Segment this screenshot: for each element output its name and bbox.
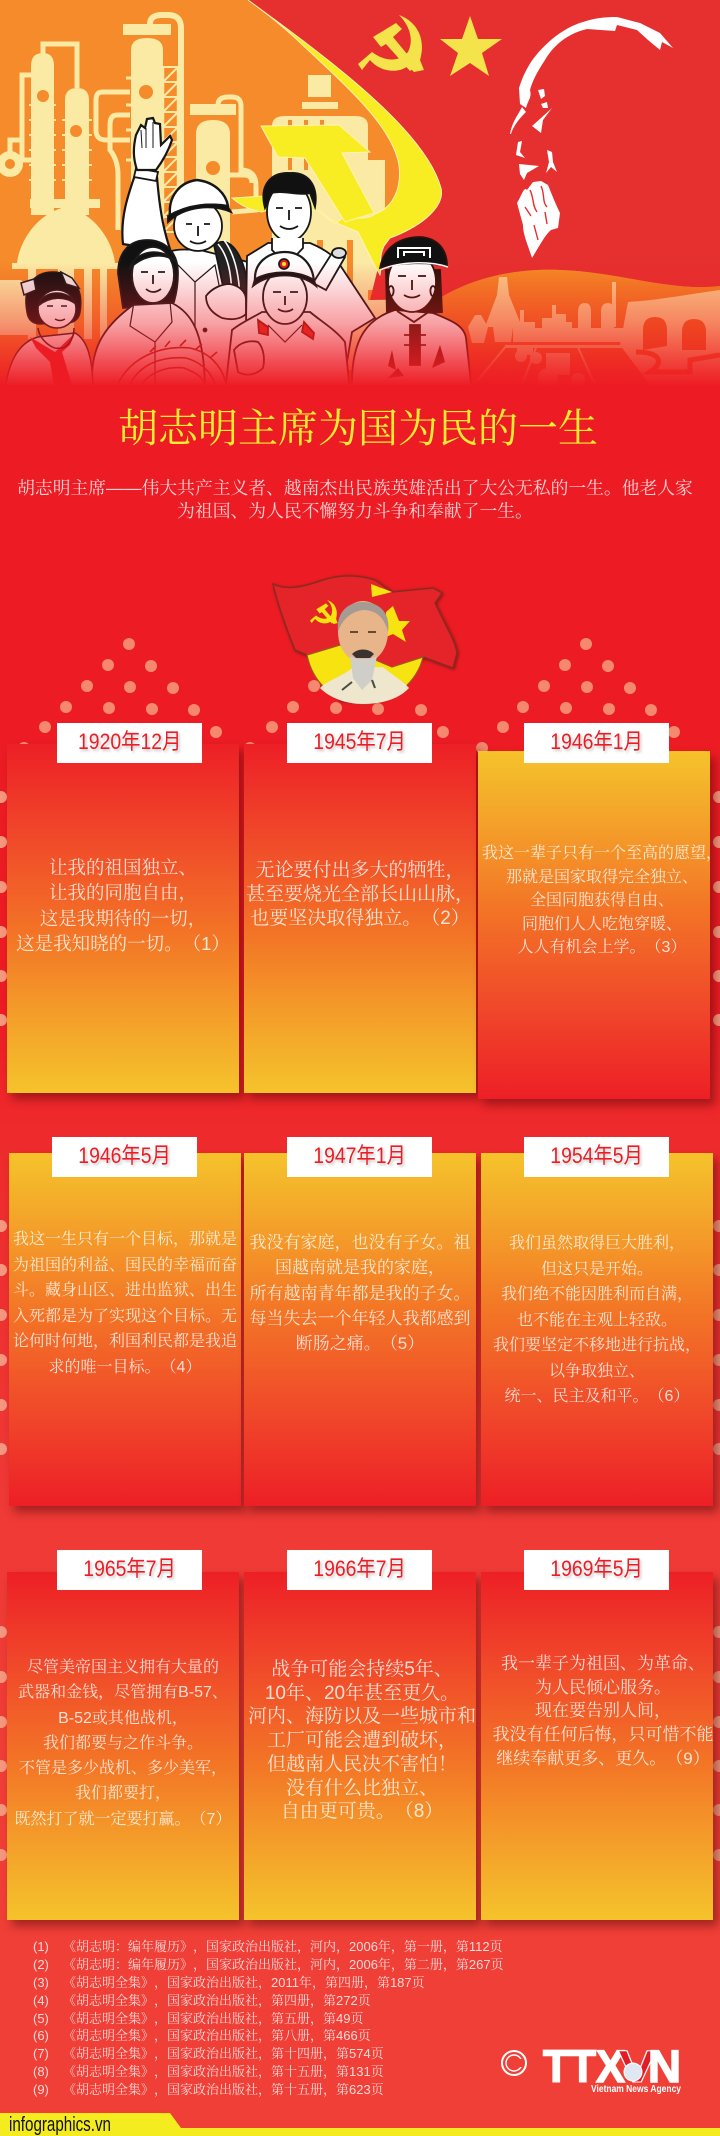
- date tab: [524, 1550, 669, 1590]
- hill arches and roads: [478, 317, 720, 388]
- date tab: 1920年12月: [78, 729, 181, 754]
- card 1947年1月: [244, 1137, 486, 1518]
- quote: 10年、20年甚至更久。: [265, 1683, 459, 1704]
- quote: 斗。藏身山区、进出监狱、出生: [13, 1282, 237, 1299]
- globe: [624, 2063, 642, 2081]
- references list: (5): [33, 2011, 49, 2026]
- quote: [16, 857, 230, 954]
- quote: 没有什么比独立、: [286, 1778, 438, 1799]
- portrait emblem with flags: [271, 574, 461, 705]
- quote: [248, 1658, 476, 1822]
- references list: 《胡志明全集》，国家政治出版社，第四册，第272页: [63, 1993, 371, 2008]
- quote: [250, 1233, 470, 1353]
- TTX letters: TTX: [543, 2041, 625, 2092]
- V letter: V: [618, 2041, 656, 2092]
- references list: (8): [33, 2064, 49, 2079]
- quote: 所有越南青年都是我的子女。: [250, 1284, 470, 1303]
- date tab: [524, 723, 669, 763]
- title: 胡志明主席为国为民的一生: [118, 397, 598, 454]
- date tab: 1945年7月: [313, 729, 406, 754]
- yellow band and medal: [307, 645, 423, 704]
- red flag field: [248, 0, 720, 300]
- quote: [492, 1654, 714, 1768]
- references list: [33, 1939, 504, 2097]
- girl with bows: [5, 272, 93, 392]
- site name: infographics.vn: [9, 2114, 111, 2136]
- date tab: 1954年5月: [550, 1143, 643, 1168]
- quote: 我一辈子为祖国、为革命、: [501, 1654, 705, 1673]
- date tab: [287, 1550, 432, 1590]
- references list: 《胡志明全集》，国家政治出版社，第十五册，第623页: [63, 2082, 384, 2097]
- hammer and sickle large yellow: [232, 0, 442, 275]
- quote: [246, 860, 474, 929]
- references list: (4): [33, 1993, 49, 2008]
- references list: (3): [33, 1975, 49, 1990]
- quote: 继续奉献更多、更久。（9）: [496, 1749, 710, 1768]
- intro text: 胡志明主席——伟大共产主义者、越南杰出民族英雄活出了大公无私的一生。他老人家: [17, 478, 693, 498]
- intro text: [17, 478, 693, 521]
- refinery pipes and ladder: [10, 15, 350, 330]
- woman in cap: [352, 237, 472, 392]
- quote: 我这一生只有一个目标，那就是: [13, 1231, 237, 1248]
- quote: 无论要付出多大的牺牲，: [255, 860, 464, 881]
- quote: 但越南人民决不害怕！: [267, 1754, 457, 1775]
- quote: 自由更可贵。（8）: [281, 1801, 443, 1822]
- quote: 为祖国的利益、国民的幸福而奋: [13, 1256, 237, 1274]
- quote: [482, 844, 720, 956]
- soldier in helmet: [225, 252, 350, 392]
- quote: 也不能在主观上轻敌。: [517, 1312, 677, 1328]
- quote: 不管是多少战机、多少美军，: [19, 1760, 227, 1777]
- quote: 战争可能会持续5年、: [271, 1659, 453, 1680]
- quote: 但这只是开始。: [541, 1260, 653, 1278]
- card 1945年7月: [244, 723, 486, 1105]
- portrait face: [338, 601, 388, 663]
- quote: 断肠之痛。（5）: [296, 1334, 424, 1353]
- quote: 我们都要打，: [75, 1785, 171, 1802]
- references list: (2): [33, 1957, 49, 1972]
- card body: [7, 1572, 239, 1920]
- quote: 河内、海防以及一些城市和: [248, 1706, 476, 1727]
- date tab: 1965年7月: [83, 1556, 176, 1581]
- quote: 我没有家庭，也没有子女。祖: [250, 1233, 470, 1252]
- quote: 既然打了就一定要打赢。（7）: [15, 1811, 231, 1828]
- quote: 让我的同胞自由，: [49, 882, 197, 903]
- agency name: Vietnam News Agency: [591, 2083, 681, 2095]
- quote: 甚至要烧光全部长山山脉，: [246, 884, 474, 905]
- quote: 那就是国家取得完全独立、: [506, 868, 698, 886]
- flag star: [386, 606, 410, 642]
- worker raising arm: [122, 118, 250, 392]
- card 1966年7月: [244, 1550, 486, 1932]
- quote: 人人有机会上学。（3）: [518, 939, 686, 956]
- orange sky background: [0, 0, 720, 400]
- references list: 《胡志明全集》，国家政治出版社，第八册，第466页: [63, 2028, 371, 2043]
- quote: 这是我期待的一切，: [40, 908, 206, 929]
- Ho Chi Minh white silhouette: [510, 17, 673, 258]
- card 1965年7月: [6, 1550, 250, 1932]
- quote: 也要坚决取得独立。（2）: [250, 908, 470, 929]
- N letter: N: [648, 2041, 681, 2092]
- references list: 《胡志明全集》，国家政治出版社，第十五册，第131页: [63, 2064, 384, 2079]
- references list: 《胡志明：编年履历》，国家政治出版社，河内，2006年，第一册，第112页: [63, 1939, 503, 1954]
- date tab: 1966年7月: [313, 1556, 406, 1581]
- quote: 我们虽然取得巨大胜利，: [509, 1235, 685, 1252]
- card 1946年1月: [478, 723, 720, 1111]
- references list: (6): [33, 2028, 49, 2043]
- date tab: [287, 1137, 432, 1177]
- hero illustration: [0, 0, 720, 382]
- quote: 为人民倾心服务。: [535, 1678, 671, 1697]
- yellow star: [440, 16, 502, 76]
- wheat sheaf: [118, 340, 226, 384]
- card 1946年5月: [8, 1137, 251, 1518]
- date tab: 1969年5月: [550, 1556, 643, 1581]
- quote: 全国同胞获得自由、: [530, 892, 674, 909]
- quote: 入死都是为了实现这个目标。无: [13, 1308, 237, 1324]
- card body: [481, 1572, 713, 1920]
- quote: 每当失去一个年轻人我都感到: [250, 1309, 470, 1328]
- quote: 尽管美帝国主义拥有大量的: [27, 1659, 219, 1676]
- date tab: 1947年1月: [313, 1143, 406, 1168]
- quote: 我们要坚定不移地进行抗战，: [493, 1337, 701, 1354]
- references list: 《胡志明全集》，国家政治出版社，2011年，第四册，第187页: [63, 1975, 425, 1990]
- worker with black hair: [245, 173, 375, 392]
- date tab: [52, 1137, 197, 1177]
- references list: (1): [33, 1939, 49, 1954]
- footer band: [0, 2113, 720, 2136]
- flag hammer sickle: [310, 600, 338, 624]
- references list: (9): [33, 2082, 49, 2097]
- quote: 统一、民主及和平。（6）: [505, 1388, 689, 1405]
- copyright circle: [502, 2051, 526, 2075]
- quote: B-52或其他战机，: [58, 1710, 188, 1727]
- card body: [7, 744, 239, 1093]
- quote: 武器和金钱，尽管拥有B-57、: [18, 1684, 228, 1701]
- party flag: [273, 576, 457, 700]
- quote: 让我的祖国独立、: [49, 857, 197, 878]
- card 1954年5月: [481, 1137, 720, 1518]
- card 1920年12月: [6, 723, 249, 1105]
- quote: [493, 1234, 701, 1405]
- quote: [15, 1658, 231, 1828]
- party emblem hammer sickle: [358, 15, 424, 72]
- quote: 我们绝不能因胜利而自满，: [501, 1286, 693, 1303]
- portrait coat: [320, 667, 409, 704]
- date tab: 1946年1月: [550, 729, 643, 754]
- quote: 以争取独立、: [549, 1362, 645, 1380]
- intro text: 为祖国、为人民不懈努力斗争和奉献了一生。: [177, 501, 533, 521]
- cream refinery silhouettes: [0, 24, 386, 370]
- quote: 我这一辈子只有一个至高的愿望，: [482, 845, 720, 862]
- date tab: [287, 723, 432, 763]
- quote: 同胞们人人吃饱穿暖、: [522, 916, 682, 932]
- card body: [244, 1153, 476, 1506]
- quote: 现在要告别人间，: [535, 1701, 671, 1720]
- card body: [478, 751, 710, 1099]
- card body: [9, 1153, 241, 1506]
- bottom red fade: [0, 262, 720, 386]
- card body: [244, 1572, 476, 1920]
- card body: [244, 744, 476, 1093]
- date tab: [57, 723, 202, 763]
- references list: 《胡志明全集》，国家政治出版社，第十四册，第574页: [63, 2046, 384, 2061]
- quote: 这是我知晓的一切。（1）: [16, 933, 230, 954]
- date tab: [57, 1550, 202, 1590]
- card 1969年5月: [481, 1550, 720, 1932]
- quote: 工厂可能会遭到破坏，: [267, 1730, 457, 1751]
- references list: 《胡志明全集》，国家政治出版社，第五册，第49页: [63, 2011, 363, 2026]
- references list: (7): [33, 2046, 49, 2061]
- quote: 求的唯一目标。（4）: [49, 1358, 201, 1376]
- refinery circular windows: [5, 85, 220, 175]
- card body: [481, 1153, 713, 1506]
- date tab: [524, 1137, 669, 1177]
- date tab: 1946年5月: [78, 1143, 171, 1168]
- orange hill with skyline: [430, 270, 720, 400]
- quote: 国越南就是我的家庭，: [275, 1258, 445, 1277]
- quote: 我们都要与之作斗争。: [43, 1735, 203, 1752]
- quote: 论何时何地，利国利民都是我追: [13, 1333, 237, 1350]
- quote: [13, 1230, 237, 1376]
- quote: 我没有任何后悔，只可惜不能: [492, 1725, 714, 1744]
- beard shading strokes: [525, 186, 547, 240]
- woman with black hair: [92, 240, 205, 392]
- references list: 《胡志明：编年履历》，国家政治出版社，河内，2006年，第二册，第267页: [63, 1957, 504, 1972]
